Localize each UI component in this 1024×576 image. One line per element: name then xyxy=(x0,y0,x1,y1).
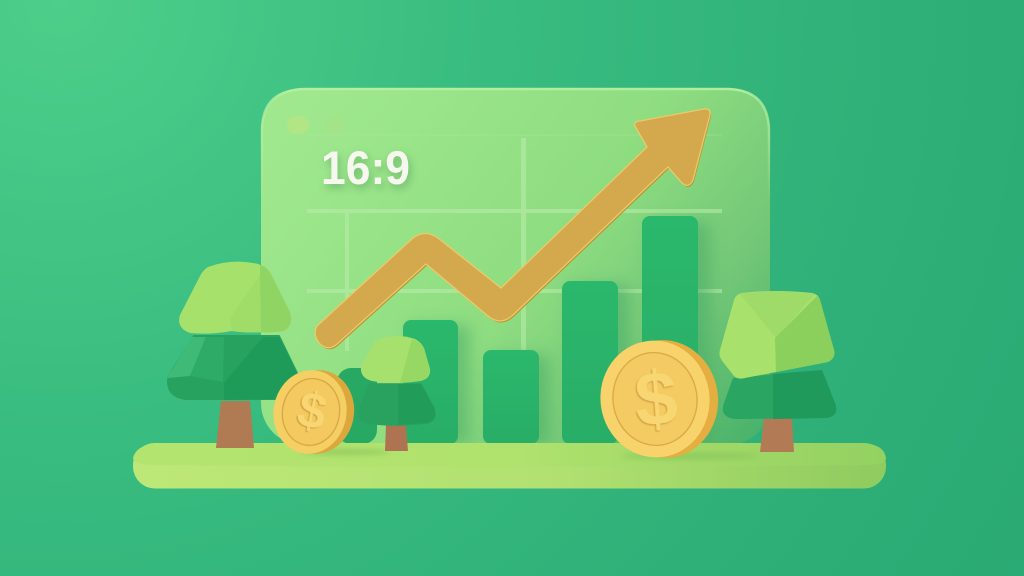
dollar sign: $ xyxy=(632,356,680,443)
lower foliage xyxy=(359,384,435,425)
upper foliage xyxy=(179,262,291,334)
window buttons xyxy=(287,116,343,134)
growth arrow xyxy=(315,109,711,349)
tree: left large xyxy=(168,262,298,448)
contact shadows xyxy=(300,450,760,458)
upper foliage xyxy=(719,291,834,379)
grid lines xyxy=(307,134,722,351)
lower foliage xyxy=(723,370,836,419)
coin: large xyxy=(593,333,726,465)
tree: right xyxy=(719,291,836,452)
chart panel xyxy=(261,88,770,445)
coin: small xyxy=(267,364,361,460)
dollar sign: $ xyxy=(293,381,332,441)
upper foliage xyxy=(361,336,430,383)
bar chart xyxy=(337,216,710,445)
platform xyxy=(133,443,886,488)
ratio label: 16:9 xyxy=(321,141,410,194)
tree: middle small xyxy=(359,336,435,451)
trunk xyxy=(216,401,254,448)
lower foliage xyxy=(168,336,298,399)
